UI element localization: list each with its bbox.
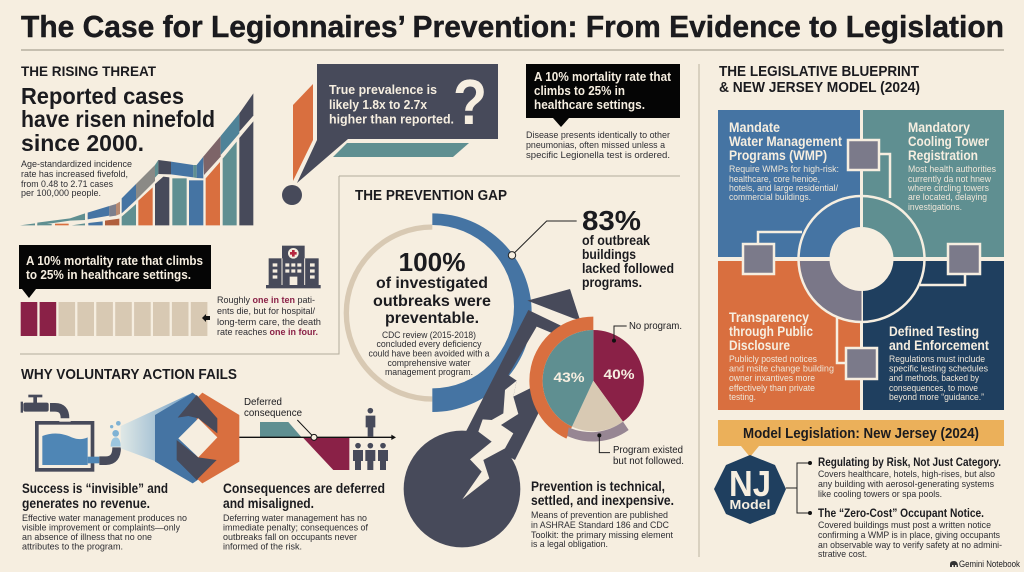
- heading: the rising threat: THE RISING THREAT: [21, 63, 156, 79]
- teal accent shape: [333, 143, 469, 157]
- callout text: [26, 254, 203, 282]
- quadrant text: mandate WMP: hotels, and large residential/: [729, 183, 838, 193]
- text: 83 percent: buildings: [582, 247, 636, 262]
- heading: legislative blueprint: & NEW JERSEY MODEL (2024): [719, 80, 920, 96]
- text: 100 percent: concluded every deficiency: [376, 339, 482, 350]
- quadrant text: defined testing: and methods, backed by: [889, 373, 979, 383]
- icon: faucet and water tank: [21, 395, 121, 472]
- central hub diagram: [743, 140, 980, 379]
- text: regulating by risk: any building with aerosol-generating systems: [818, 479, 994, 490]
- heading: legislative blueprint: [719, 64, 920, 96]
- chart: rising cases bars and ribbon: [20, 93, 253, 225]
- text: prevention is technical: [531, 479, 674, 550]
- text: prevention is technical: is a legal obligation.: [531, 539, 608, 550]
- bubble text: [329, 83, 454, 126]
- text: one in ten, one in four: Roughly one in ten pati-: [217, 295, 315, 306]
- quadrant text: transparency: Disclosure: [729, 338, 790, 353]
- callout text: to 25% in healthcare settings.: [26, 268, 191, 282]
- label: deferred consequence: [244, 396, 302, 419]
- text: 83 percent: lacked followed: [582, 261, 674, 276]
- quadrant text: mandate WMP: commercial buildings.: [729, 192, 811, 202]
- text: prevention is technical: Toolkit: the primary missing element: [531, 530, 673, 541]
- quadrant text: cooling tower registration: Mandatory: [908, 120, 970, 135]
- text: 100 percent: could have been avoided with a: [368, 348, 490, 360]
- quadrant text: transparency: and msite change building: [729, 364, 834, 374]
- callout text: A 10% mortality rate that climbs: [26, 254, 203, 268]
- text: consequences deferred: outbreaks fall on occupants never: [223, 532, 357, 543]
- text: regulating by risk: like cooling towers or spa pools.: [818, 489, 942, 500]
- ten-block proportion chart: [21, 302, 210, 336]
- quadrant text: defined testing: and Enforcement: [889, 338, 989, 353]
- heading: why voluntary action fails: WHY VOLUNTARY ACTION FAILS: [21, 366, 237, 383]
- quadrant text: mandate WMP: Mandate: [729, 120, 780, 135]
- text: one in ten, one in four: [217, 295, 321, 338]
- quadrant text: cooling tower registration: where circling towers: [907, 183, 989, 193]
- black box: [526, 64, 680, 127]
- banner: model legislation: [718, 420, 1004, 457]
- text: success is invisible: generates no revenue.: [22, 496, 150, 511]
- banner text: Model Legislation: New Jersey (2024): [743, 426, 979, 442]
- quadrant text: transparency: Transparency: [729, 310, 809, 325]
- connector lines: [786, 461, 812, 515]
- speech bubble: [297, 64, 498, 183]
- leader line and marker: [508, 221, 577, 259]
- icon: people: [353, 408, 388, 470]
- quadrant text: cooling tower registration: are located, delaying: [908, 192, 987, 202]
- text: one in ten, one in four: ents die, but for hospital/: [217, 306, 315, 317]
- headline: reported cases: since 2000.: [21, 130, 144, 156]
- text: 100 percent: outbreaks were: [373, 293, 491, 310]
- quadrant text: mandate WMP: Require WMPs for high-risk:: [729, 164, 839, 174]
- text: incidence rate: [21, 159, 132, 199]
- quadrant text: defined testing: consequences, to move: [889, 383, 978, 393]
- text: 100 percent: 100%: [398, 247, 466, 277]
- text: one in ten, one in four: long-term care, the death: [217, 317, 321, 328]
- badge: NJ model: [714, 455, 786, 524]
- text: consequences deferred: Consequences are deferred: [223, 481, 385, 496]
- label: deferred consequence: consequence: [244, 407, 302, 419]
- text: consequences deferred: and misaligned.: [223, 496, 314, 511]
- text: prevention is technical: settled, and inexpensive.: [531, 493, 674, 508]
- label: no program: No program.: [629, 320, 682, 332]
- badge: NJ model: Model: [730, 498, 770, 512]
- quadrant backgrounds: [718, 110, 1004, 410]
- text: 100 percent: management program.: [385, 367, 473, 378]
- text: success is invisible: [22, 481, 187, 552]
- text: incidence rate: rate has increased fivefold,: [21, 169, 128, 180]
- text: success is invisible: Effective water management produces no: [22, 513, 187, 524]
- leader lines for pie: [597, 326, 627, 453]
- black box callout: [19, 245, 211, 298]
- title: The Case for Legionnaires’ Prevention: From Evidence to Legislation: [21, 9, 1004, 44]
- text: regulating by risk: Covers healthcare, hotels, high-rises, but also: [818, 469, 995, 480]
- pie labels: [554, 366, 635, 385]
- text: disease presentation: specific Legionella test is ordered.: [526, 150, 670, 161]
- callout: true prevalence: [282, 64, 498, 205]
- text: incidence rate: Age-standardized incidence: [21, 159, 132, 170]
- text: success is invisible: visible improvement or complaints—only: [22, 522, 180, 534]
- text: consequences deferred: immediate penalty; consequences of: [223, 522, 368, 534]
- text: one in ten, one in four: rate reaches one in four.: [217, 327, 318, 338]
- quadrant text: cooling tower registration: Cooling Tower: [908, 134, 990, 149]
- heading: the prevention gap: THE PREVENTION GAP: [355, 188, 507, 204]
- headline: reported cases: [21, 83, 215, 156]
- text: disease presentation: Disease presents identically to other: [526, 130, 670, 141]
- text: success is invisible: an absence of illness that no one: [22, 532, 152, 543]
- text: success is invisible: attributes to the program.: [22, 542, 123, 552]
- quadrant text: mandate WMP: healthcare, core henioe,: [729, 174, 820, 184]
- text: 83 percent: [582, 205, 674, 290]
- label: deferred consequence: Deferred: [244, 396, 282, 408]
- text: incidence rate: per 100,000 people.: [21, 188, 101, 199]
- text: disease presentation: [526, 130, 670, 161]
- text: prevention is technical: in ASHRAE Standard 186 and CDC: [531, 520, 669, 531]
- icon: hospital: [266, 246, 321, 288]
- text: 100 percent: comprehensive water: [388, 358, 470, 369]
- pie chart: program status: [529, 317, 644, 442]
- label: program existed: but not followed.: [613, 455, 684, 467]
- bubble text: higher than reported.: [329, 112, 454, 126]
- text: consequences deferred: informed of the risk.: [223, 542, 302, 552]
- bubble text: True prevalence is: [329, 83, 437, 97]
- quadrant text: mandate WMP: Water Management: [729, 134, 842, 149]
- orange accent shape: [293, 84, 313, 181]
- exclamation dot: [282, 185, 302, 205]
- text: disease presentation: pneumonias, often missed unless a: [526, 140, 666, 151]
- question mark: ?: [453, 66, 487, 138]
- label: program existed: [613, 444, 684, 467]
- text: consequences deferred: Deferring water management has no: [223, 513, 367, 524]
- text: 100 percent: preventable.: [385, 310, 479, 327]
- text: 100 percent: CDC review (2015-2018): [382, 330, 476, 341]
- panel: the prevention gap: [346, 188, 684, 550]
- text: zero-cost occupant notice: The “Zero-Cost” Occupant Notice.: [818, 506, 984, 520]
- panel: the rising threat: [20, 63, 253, 225]
- badge: NJ model: NJ: [729, 463, 771, 504]
- quadrant text: defined testing: beyond more “guidance.”: [889, 392, 984, 402]
- text: success is invisible: Success is “invisible” and: [22, 481, 168, 496]
- bubble text: likely 1.8x to 2.7x: [329, 98, 427, 112]
- quadrant text: transparency: owner inxantives more: [729, 373, 815, 383]
- callout: mortality rate top: [526, 64, 680, 161]
- text: prevention is technical: Means of prevention are published: [531, 510, 668, 521]
- text: 83 percent: of outbreak: [582, 233, 650, 248]
- panel: legislative blueprint: [718, 64, 1004, 410]
- quadrant text: defined testing: [889, 324, 989, 402]
- quadrant text: transparency: effectively than private: [729, 383, 815, 393]
- quadrant text: cooling tower registration: Most health authorities: [908, 164, 996, 174]
- quadrant text: transparency: [729, 310, 834, 402]
- text: 83 percent: programs.: [582, 275, 642, 290]
- panel: mortality: [19, 245, 321, 338]
- headline: reported cases: Reported cases: [21, 83, 184, 109]
- quadrant text: defined testing: specific lesting schedules: [889, 364, 988, 374]
- chart: deferred consequence timeline: [239, 420, 396, 470]
- box text: A 10% mortality rate that: [534, 70, 672, 84]
- quadrant text: transparency: through Public: [729, 324, 813, 339]
- text: regulating by risk: [818, 455, 1001, 500]
- pie labels: 40%: [604, 366, 635, 382]
- text: zero-cost occupant notice: [818, 506, 1002, 560]
- donut: 100 percent preventable: [346, 213, 532, 412]
- text: zero-cost occupant notice: strative cost.: [818, 549, 867, 560]
- headline: reported cases: have risen ninefold: [21, 106, 215, 132]
- quadrant text: mandate WMP: [729, 120, 842, 202]
- quadrant text: cooling tower registration: Registration: [908, 148, 978, 163]
- text: zero-cost occupant notice: an observable way to verify safety at no admini-: [818, 540, 1002, 551]
- text: prevention is technical: Prevention is technical,: [531, 479, 665, 494]
- text: 83 percent: 83%: [582, 205, 641, 236]
- pie labels: 43%: [554, 369, 585, 385]
- heading: legislative blueprint: THE LEGISLATIVE BLUEPRINT: [719, 64, 919, 80]
- box text: [534, 70, 672, 112]
- text: 100 percent: [368, 247, 491, 378]
- label: program existed: Program existed: [613, 444, 683, 456]
- panel: model legislation: [714, 420, 1004, 560]
- panel: why voluntary action fails: [21, 366, 396, 552]
- quadrant text: mandate WMP: Programs (WMP): [729, 148, 827, 163]
- diagram: hexagon cycle: [121, 393, 239, 483]
- text: incidence rate: from 0.48 to 2.71 cases: [21, 179, 113, 190]
- quadrant text: defined testing: Defined Testing: [889, 324, 979, 339]
- box text: climbs to 25% in: [534, 84, 625, 98]
- text: zero-cost occupant notice: Covered buildings must post a written notice: [818, 520, 991, 531]
- quadrant text: transparency: testing.: [729, 392, 756, 402]
- quadrant text: cooling tower registration: investigations.: [908, 202, 962, 212]
- text: zero-cost occupant notice: confirming a WMP is in place, giving occupants: [818, 530, 1000, 541]
- icon: broken key: [404, 289, 580, 547]
- quadrant text: defined testing: Regulations must include: [889, 354, 985, 364]
- text: consequences deferred: [223, 481, 385, 552]
- box text: healthcare settings.: [534, 98, 645, 112]
- quadrant text: transparency: Publicly posted notices: [729, 354, 817, 364]
- text: 100 percent: of investigated: [376, 275, 488, 292]
- quadrant text: cooling tower registration: [907, 120, 996, 212]
- quadrant text: cooling tower registration: currently da not hnew: [908, 174, 991, 184]
